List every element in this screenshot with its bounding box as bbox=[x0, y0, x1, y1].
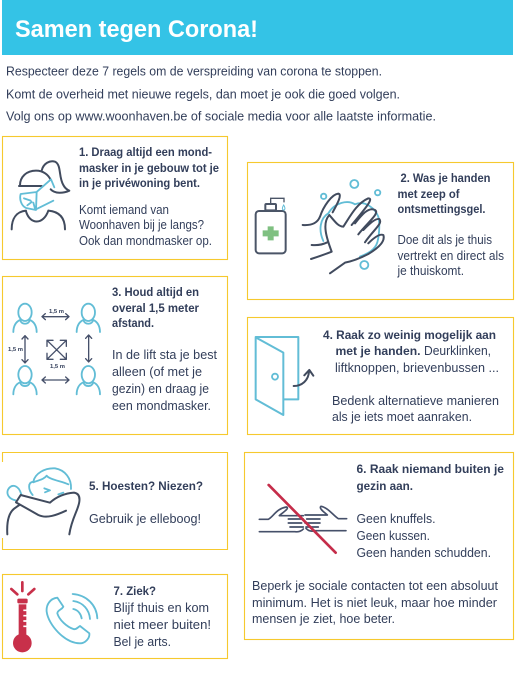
icon: thermometer bbox=[11, 582, 34, 652]
rule 1 text: Woonhaven bij je langs? bbox=[79, 218, 204, 232]
rule 7 text: Blijf thuis en kom bbox=[114, 601, 209, 615]
rule 6 text bbox=[252, 462, 504, 626]
rule 1 text: in je privéwoning bent. bbox=[79, 176, 200, 190]
panel: rule 3 distance bbox=[2, 276, 228, 434]
rule 4 text: liftknoppen, brievenbussen ... bbox=[335, 361, 499, 375]
rule 2 text: 2. Was je handen bbox=[400, 171, 490, 185]
rule 7 text: niet meer buiten! bbox=[114, 618, 211, 632]
rule 3 text: alleen (of met je bbox=[112, 364, 202, 379]
rule 1 text: Ook dan mondmasker op. bbox=[79, 234, 212, 248]
panel: rule 1 mask bbox=[2, 136, 228, 260]
distance labels: 1,5 m bbox=[8, 347, 23, 353]
rule 3 text: gezin) en draag je bbox=[112, 381, 209, 396]
intro text: Komt de overheid met nieuwe regels, dan moet je ook die goed volgen. bbox=[6, 88, 400, 102]
rule 2 text: vertrekt en direct als bbox=[398, 249, 504, 263]
rule 6 text: mensen je ziet, hoe beter. bbox=[252, 612, 395, 626]
rule 7 text bbox=[114, 584, 211, 649]
rule 3 text: In de lift sta je best bbox=[112, 347, 217, 362]
panel: rule 5 cough bbox=[2, 452, 228, 550]
rule 1 text bbox=[79, 145, 219, 248]
icon: sanitizer bottle bbox=[256, 198, 286, 253]
panel: rule 7 sick bbox=[2, 574, 228, 658]
rule 4 text: 4. Raak zo weinig mogelijk aan bbox=[323, 328, 496, 342]
rule 5 text bbox=[89, 479, 203, 526]
rule 2 text: ontsmettingsgel. bbox=[398, 202, 486, 216]
icon: crossed out handshake bbox=[259, 485, 347, 553]
rule 3 text bbox=[112, 285, 217, 413]
title: Samen tegen Corona! bbox=[15, 16, 258, 43]
icon: phone bbox=[47, 594, 97, 643]
rule 6 text: minimum. Het is niet leuk, maar hoe minder bbox=[252, 596, 497, 610]
distance labels: 1,5 m bbox=[49, 309, 64, 315]
rule 4 text: Bedenk alternatieve manieren bbox=[332, 394, 499, 408]
rule 6 text: 6. Raak niemand buiten je bbox=[356, 462, 504, 476]
icon: person with face mask bbox=[12, 161, 69, 229]
rule 5 text: 5. Hoesten? Niezen? bbox=[89, 479, 203, 493]
icon: washing hands bbox=[303, 180, 384, 273]
distance labels: 1,5 m bbox=[50, 364, 65, 370]
panel: rule 4 touch less bbox=[248, 318, 514, 434]
distance labels bbox=[8, 309, 65, 370]
rule 2 text: met zeep of bbox=[398, 187, 460, 201]
rule 2 text bbox=[397, 171, 504, 278]
rule 2 text: Doe dit als je thuis bbox=[398, 233, 492, 247]
rule 4 text: met je handen. bbox=[336, 344, 420, 358]
rule 4 text: als je iets moet aanraken. bbox=[332, 410, 472, 424]
rule 1 text: Komt iemand van bbox=[79, 203, 169, 217]
rule 6 text: gezin aan. bbox=[356, 479, 413, 493]
rule 4 text: Deurklinken, bbox=[424, 344, 491, 358]
rule 3 text: 3. Houd altijd en bbox=[112, 285, 199, 299]
rule 1 text: 1. Draag altijd een mond- bbox=[79, 145, 212, 159]
icon: people at 1.5 meter distance bbox=[13, 304, 100, 394]
rule 7 text: 7. Ziek? bbox=[114, 584, 156, 598]
rule 3 text: overal 1,5 meter bbox=[112, 301, 199, 315]
rule 6 text: Geen handen schudden. bbox=[356, 546, 491, 560]
header banner bbox=[2, 0, 513, 55]
intro text: Respecteer deze 7 regels om de verspreiding van corona te stoppen. bbox=[6, 64, 382, 78]
rule 3 text: een mondmasker. bbox=[112, 398, 211, 413]
rule 2 text: je thuiskomt. bbox=[397, 264, 464, 278]
intro text bbox=[6, 64, 436, 124]
rule 6 text: Geen kussen. bbox=[356, 529, 430, 543]
rule 6 text: Geen knuffels. bbox=[356, 512, 436, 526]
rule 4 text bbox=[323, 328, 499, 424]
icon: sneezing into elbow bbox=[7, 468, 79, 534]
icon: door with arrow bbox=[256, 337, 313, 415]
intro text: Volg ons op www.woonhaven.be of sociale media voor alle laatste informatie. bbox=[6, 110, 436, 124]
rule 5 text: Gebruik je elleboog! bbox=[89, 512, 201, 526]
rule 1 text: masker in je gebouw tot je bbox=[79, 161, 219, 175]
rule 6 text: Beperk je sociale contacten tot een absoluut bbox=[252, 579, 498, 593]
rule 7 text: Bel je arts. bbox=[114, 635, 171, 649]
rule 3 text: afstand. bbox=[112, 316, 154, 330]
panel: rule 6 no contact bbox=[244, 452, 514, 640]
panel: rule 2 wash hands bbox=[248, 162, 514, 300]
